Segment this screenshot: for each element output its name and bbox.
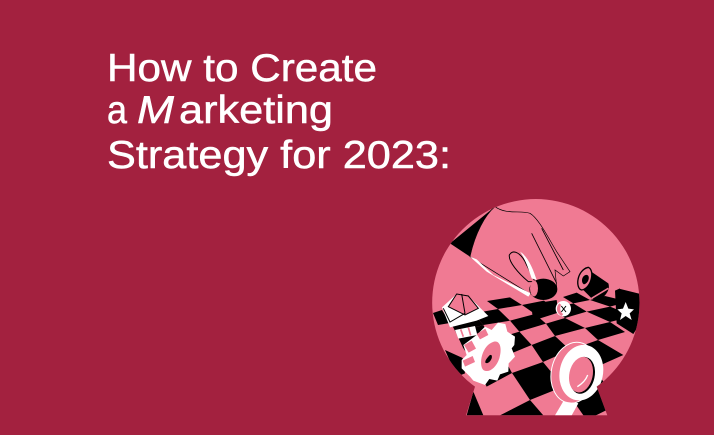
- magnifying glass: [550, 342, 604, 416]
- envelope: [442, 294, 488, 339]
- chessboard: [433, 293, 633, 420]
- title: How to Create: [107, 47, 377, 90]
- title: [107, 47, 451, 177]
- title: M: [137, 89, 175, 132]
- illustration: crystal ball with chessboard: [432, 199, 640, 416]
- title: Strategy for 2023:: [107, 134, 451, 177]
- megaphone: [578, 267, 609, 301]
- title: arketing: [179, 89, 333, 132]
- pawn piece: [529, 279, 558, 320]
- title: a: [107, 89, 127, 132]
- star book: [615, 288, 640, 334]
- sleeve: [450, 208, 492, 256]
- hand: [470, 207, 570, 297]
- x token: [556, 301, 571, 316]
- gear: [462, 323, 515, 385]
